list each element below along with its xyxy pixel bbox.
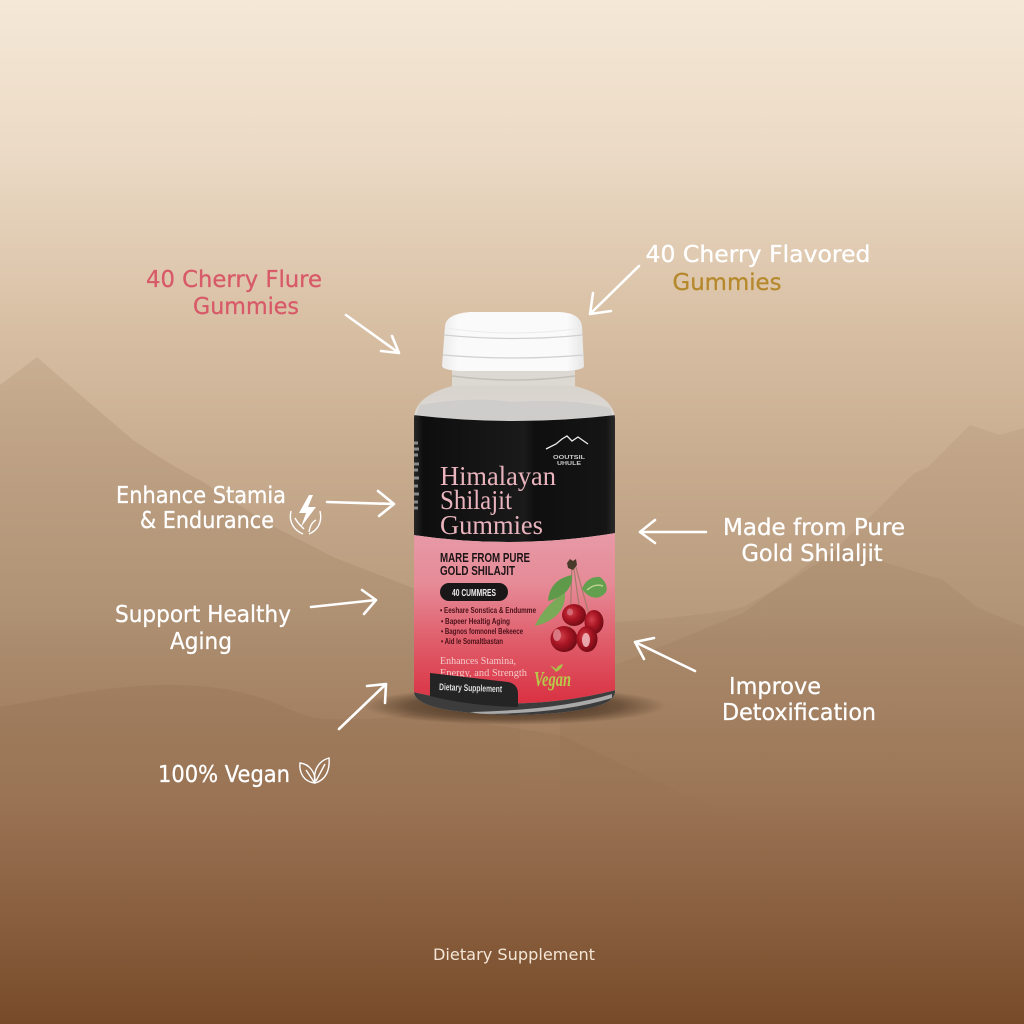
- heading: 40 Cherry Flure Gummies: 40 Cherry Flure: [146, 267, 322, 293]
- footer: Dietary Supplement: [433, 945, 595, 964]
- product bottle: [362, 312, 666, 725]
- callout: enhance stamina: [116, 483, 286, 534]
- label subtitle: MARE FROM PURE: [440, 550, 530, 565]
- callout: healthy aging: Support Healthy: [115, 602, 291, 628]
- pink band: [413, 533, 616, 704]
- bottle neck: [452, 368, 575, 388]
- callout: vegan: 100% Vegan: [158, 762, 290, 788]
- callout: detoxification: Improve: [729, 674, 821, 700]
- callout: healthy aging: [115, 602, 291, 655]
- heading: 40 Cherry Flavored Gummies: Gummies: [672, 270, 782, 296]
- icon: bolt with leaves: [290, 495, 321, 534]
- arrow: flavored to cap: [590, 266, 639, 314]
- arrow: stamina: [327, 491, 394, 516]
- 40 gummies pill: 40 CUMMRES: [452, 588, 496, 599]
- arrow: detox: [635, 638, 695, 671]
- heading: 40 Cherry Flure Gummies: Gummies: [193, 294, 299, 320]
- heading: 40 Cherry Flure Gummies: [146, 267, 322, 320]
- arrow: flure to cap: [346, 315, 399, 353]
- product title: Gummies: [440, 510, 543, 540]
- bottle glass: [414, 386, 615, 715]
- label subtitle: GOLD SHILAJIT: [440, 563, 515, 578]
- dietary supplement tag: Dietary Supplement: [439, 682, 503, 695]
- callout: enhance stamina: Enhance Stamia: [116, 483, 286, 509]
- cherries illustration: [535, 559, 607, 652]
- mountain logo: UHULE: [557, 461, 581, 467]
- heading: 40 Cherry Flavored Gummies: [646, 242, 870, 296]
- vegan mark: Vegan: [534, 667, 571, 691]
- mountain silhouettes: [0, 357, 1024, 830]
- arrow: aging: [311, 590, 376, 614]
- heading: 40 Cherry Flavored Gummies: 40 Cherry Flavored: [646, 242, 870, 268]
- arrow: pure gold: [640, 520, 706, 543]
- callout: detoxification: [722, 674, 876, 726]
- label benefit line: Enhances Stamina,: [440, 655, 516, 667]
- mountain logo: OOUTSIL: [553, 455, 586, 461]
- bottle base: [414, 690, 615, 715]
- label bullets: [440, 605, 536, 646]
- product title: Himalayan: [440, 461, 556, 491]
- label bullets: • Eeshare Sonstica & Endumme: [440, 605, 536, 615]
- label subtitle: [440, 550, 530, 578]
- bottle label: [413, 415, 616, 720]
- vegan mark: [534, 664, 571, 691]
- callout: detoxification: Detoxification: [722, 700, 876, 726]
- black band: [413, 415, 616, 542]
- label bullets: • Bagnos fomnonel Bekeece: [441, 626, 523, 636]
- icon: leaves: [300, 758, 329, 783]
- bottle shadow: [362, 687, 666, 725]
- label bullets: • Aid le Somaltbastan: [441, 636, 503, 646]
- mountain logo: [546, 436, 588, 467]
- side print: [414, 442, 419, 510]
- 40 gummies pill: [440, 583, 508, 601]
- callout: pure gold: [723, 515, 905, 567]
- callout: pure gold: Gold Shilaljit: [742, 541, 882, 567]
- cap: [442, 312, 584, 371]
- dietary supplement tag: [430, 673, 518, 707]
- product title: [440, 461, 556, 540]
- product title: Shilajit: [440, 485, 512, 515]
- callout: healthy aging: Aging: [170, 629, 232, 655]
- label benefit line: Energy, and Strength: [440, 667, 527, 679]
- label benefit line: [440, 655, 527, 679]
- label bullets: • Bapeer Healtig Aging: [441, 616, 510, 626]
- callout: pure gold: Made from Pure: [723, 515, 905, 541]
- callout: enhance stamina: & Endurance: [140, 508, 274, 534]
- arrow: vegan: [339, 684, 386, 729]
